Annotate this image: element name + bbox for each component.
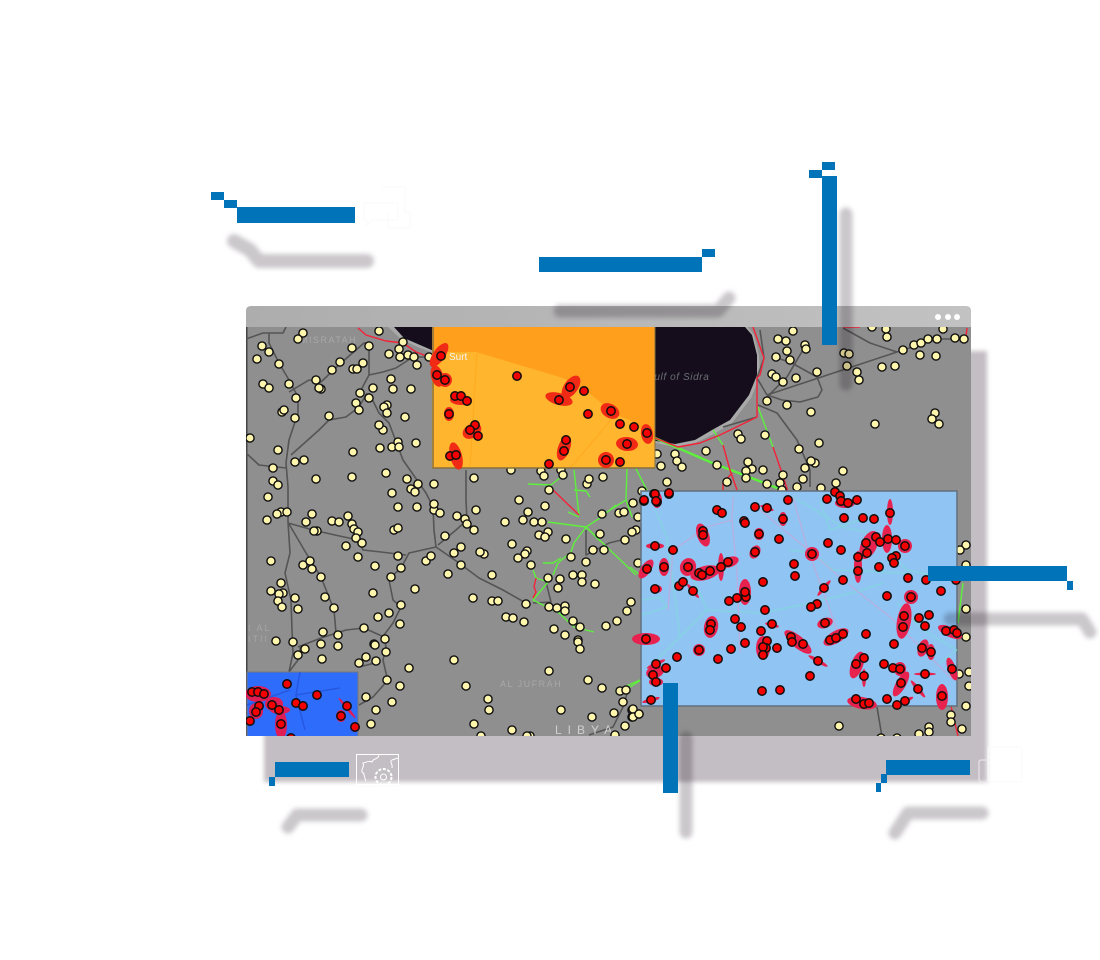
callout bar: bottom right: [876, 760, 970, 792]
faint map labels: ITII: [248, 634, 269, 644]
light-blue zone panel: [632, 488, 964, 712]
callout bar: top right vertical: [809, 162, 837, 345]
faint map labels: I AL: [248, 623, 272, 633]
callout bar: top left: [211, 192, 355, 223]
dark-blue zone red markers: [246, 680, 359, 742]
callout bar: top centre: [539, 249, 715, 272]
faint map labels: Gulf of Sidra: [646, 372, 709, 383]
icon: device frames (faint): [979, 747, 1022, 782]
light-blue zone hot-spots: [632, 492, 964, 712]
faint map labels: LIBYA: [555, 723, 618, 737]
window title bar: [246, 306, 971, 327]
red markers above light-blue zone: [640, 489, 673, 505]
yellow site markers: [246, 323, 973, 742]
dark-blue zone panel: [245, 672, 360, 742]
light-blue zone red markers: [640, 488, 961, 709]
green and red pipeline network: [528, 407, 963, 691]
callout bar: right: [928, 566, 1073, 590]
leader shadows: [234, 214, 1090, 833]
orange zone panel: [426, 327, 655, 471]
label: Surt: Surt: [449, 352, 468, 363]
faint map labels: MISRATAH: [300, 335, 357, 345]
callout bar: bottom left: [269, 762, 349, 786]
light-blue zone pink network: [668, 497, 953, 680]
faint map labels: AL JUFRAH: [500, 679, 562, 689]
dark-blue zone hot-spots: [245, 686, 360, 739]
sea: Gulf of Sidra: [388, 327, 760, 447]
infographic canvas: [211, 162, 1098, 842]
road network: [246, 327, 964, 737]
faint map labels: [248, 335, 709, 737]
icon: gears in frame: [356, 754, 398, 785]
callout bar: bottom centre vertical: [663, 683, 678, 793]
light-blue zone cyan network: [642, 497, 957, 667]
orange zone red markers: [433, 352, 651, 468]
map panel: [245, 323, 973, 742]
window drop shadow: [264, 351, 987, 782]
orange zone hot-spots: [426, 340, 655, 471]
icon: speech bubbles (faint): [364, 187, 410, 228]
